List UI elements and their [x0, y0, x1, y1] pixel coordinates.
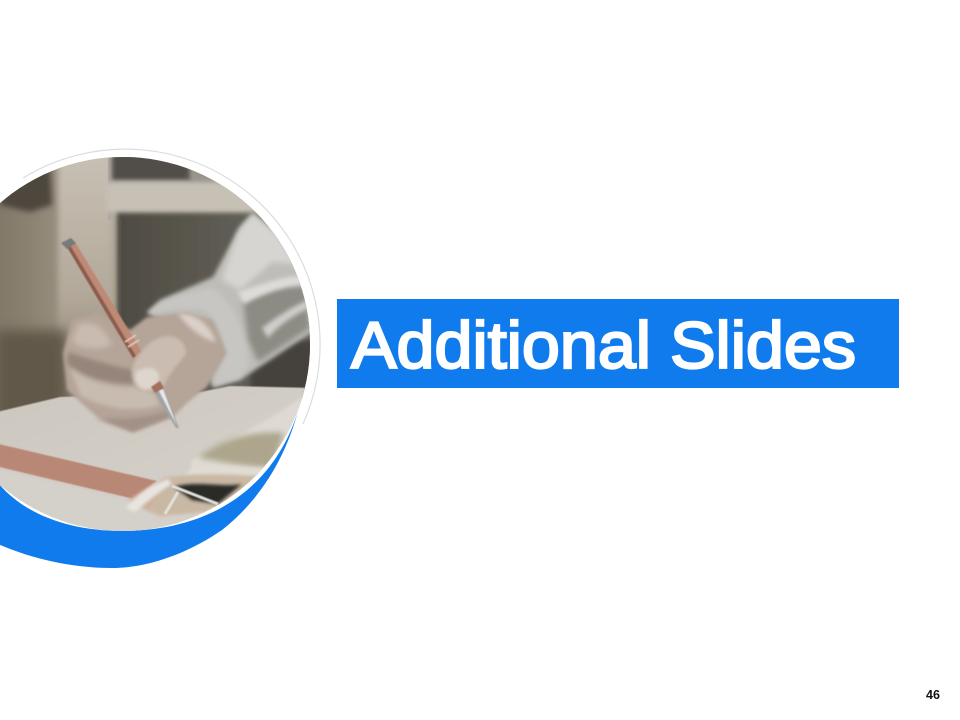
- thin ring around photo: [23, 149, 320, 424]
- photo sweater cuff: [147, 288, 248, 387]
- photo pen: [61, 238, 142, 358]
- photo background wall: [0, 150, 120, 430]
- photo pen tip: [151, 381, 179, 428]
- photo thumb: [132, 336, 186, 390]
- blue crescent: [0, 411, 298, 568]
- photo sweater sleeve: [147, 213, 312, 387]
- page number: 46: [926, 688, 940, 702]
- photo background shelf: [108, 157, 263, 220]
- photo: hand writing in a notebook: [0, 150, 320, 540]
- photo notebook edge: [0, 444, 157, 498]
- photo hand: [63, 312, 227, 432]
- photo notebook page: [0, 386, 320, 540]
- title text: Additional Slides: [351, 308, 856, 382]
- title banner: [337, 299, 899, 388]
